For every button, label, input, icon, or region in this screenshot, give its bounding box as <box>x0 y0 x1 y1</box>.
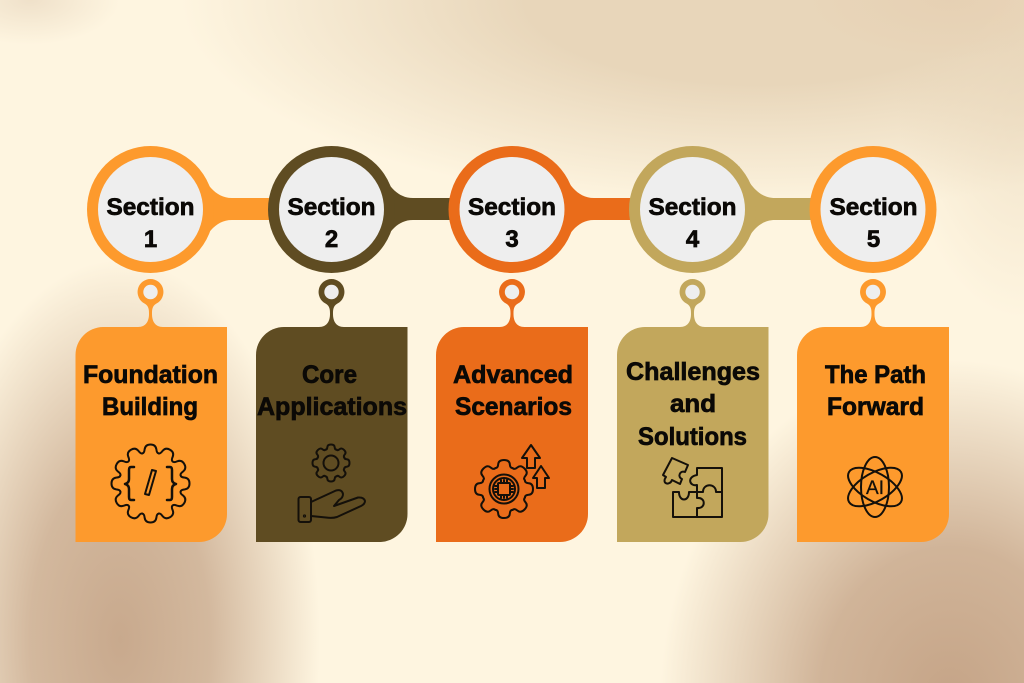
card 1: Foundation Building: Foundation <box>83 361 218 389</box>
pin 3 <box>499 279 525 327</box>
card 4: Challenges and Solutions: Challenges <box>626 358 760 386</box>
connector 4 to 5 <box>739 166 828 253</box>
connector 2 to 3 <box>377 166 466 253</box>
step 4: section circle, connector, pin and card <box>617 146 828 542</box>
card 2: Core Applications <box>256 327 408 542</box>
circle: section 3 <box>448 146 576 273</box>
card 4: Challenges and Solutions: Solutions <box>638 423 747 451</box>
icon: AI atom <box>842 457 908 517</box>
card 2: Core Applications: Core <box>302 361 357 389</box>
card 5: The Path Forward: Forward <box>827 393 924 421</box>
card 5: The Path Forward <box>797 327 949 542</box>
step 1: section circle, connector, pin and card <box>76 146 285 542</box>
circle: section 4: Section <box>648 194 736 221</box>
pin 4 <box>680 279 705 327</box>
circle: section 2: 2 <box>325 226 338 253</box>
card 3: Advanced Scenarios: Scenarios <box>455 393 572 421</box>
circle: section 3: Section <box>468 194 556 221</box>
connector 1 to 2 <box>196 166 285 253</box>
card 1: Foundation Building <box>76 327 227 542</box>
circle: section 4: 4 <box>686 226 700 253</box>
circle: section 5: 5 <box>867 226 880 253</box>
card 4: Challenges and Solutions: and <box>670 390 716 418</box>
icon: puzzle pieces <box>663 458 722 517</box>
step 2: section circle, connector, pin and card <box>256 146 466 542</box>
circle: section 5 <box>810 146 936 273</box>
circle: section 1: 1 <box>144 226 157 253</box>
circle: section 3: 3 <box>505 226 519 253</box>
card 5: The Path Forward: The Path <box>825 361 926 389</box>
card 4: Challenges and Solutions <box>617 327 768 542</box>
card 3: Advanced Scenarios: Advanced <box>453 361 573 389</box>
icon: chip gear with arrows <box>475 445 549 518</box>
pin 5 <box>860 279 886 327</box>
connector 3 to 4 <box>558 166 647 253</box>
card 1: Foundation Building: Building <box>102 393 198 421</box>
icon: AI atom: AI <box>866 478 884 499</box>
icon: code gear <box>112 444 190 522</box>
pin 2 <box>319 279 344 327</box>
circle: section 5: Section <box>830 194 918 221</box>
card 2: Core Applications: Applications <box>257 393 407 421</box>
circle: section 1 <box>87 146 214 273</box>
circle: section 4 <box>629 146 756 273</box>
icon: gear over open hand <box>298 444 365 522</box>
step 3: section circle, connector, pin and card <box>436 146 647 542</box>
circle: section 2 <box>268 146 395 273</box>
pin 1 <box>138 279 163 327</box>
circle: section 1: Section <box>106 194 194 221</box>
circle: section 2: Section <box>288 194 376 221</box>
card 3: Advanced Scenarios <box>436 327 588 542</box>
step 5: section circle, pin and card <box>797 146 949 542</box>
